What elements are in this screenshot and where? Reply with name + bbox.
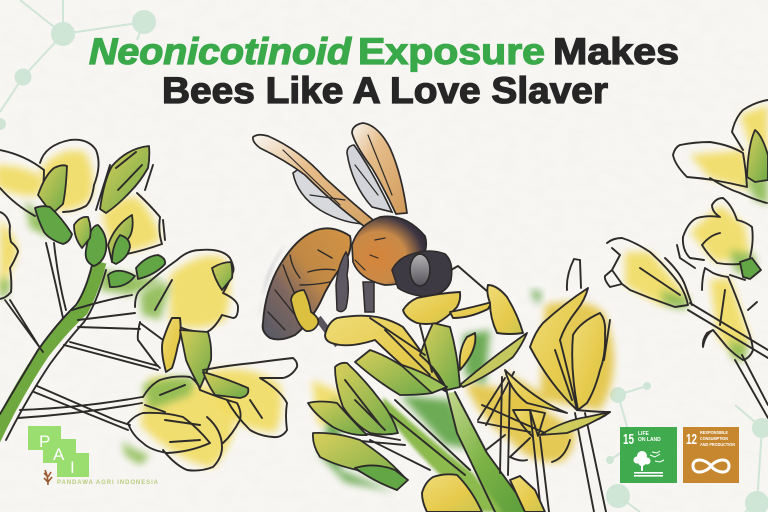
title: Exposure	[358, 31, 545, 72]
logo: Pandawa Agri Indonesia: I	[70, 458, 75, 477]
right top flower	[673, 100, 768, 203]
logo leaf icon	[44, 470, 52, 485]
right middle flower	[677, 198, 761, 280]
SDG 15 badge	[620, 427, 677, 483]
left middle flower and buds	[74, 193, 165, 287]
bee thorax	[352, 216, 426, 285]
left top bud	[96, 146, 153, 213]
SDG 12 badge: CONSUMPTION	[700, 436, 729, 441]
logo: Pandawa Agri Indonesia: A	[53, 445, 65, 464]
left edge flower	[0, 212, 18, 299]
molecule network: bottom right	[607, 383, 768, 512]
title: Neonicotinoid	[89, 31, 352, 72]
right stems	[688, 303, 768, 418]
SDG 15 badge: 15	[623, 431, 634, 448]
bee wings	[253, 123, 407, 238]
SDG 12 badge: AND PRODUCTION	[700, 442, 736, 447]
left lower flowers	[128, 358, 297, 471]
centre flower cluster	[308, 259, 614, 512]
SDG 12 badge	[683, 427, 739, 483]
right bud	[605, 238, 692, 307]
bee head	[392, 251, 488, 297]
SDG 12 badge: 12	[686, 431, 697, 448]
right washes	[625, 105, 768, 362]
title: Makes	[553, 31, 679, 72]
SDG 15 badge: LIFE	[638, 431, 649, 437]
logo: Pandawa Agri Indonesia: P	[39, 432, 50, 451]
bee legs	[291, 252, 374, 345]
left top flower	[0, 140, 99, 244]
left main stem	[0, 243, 158, 440]
title: Bees Like A Love Slaver	[162, 70, 608, 111]
left large flower	[135, 250, 238, 388]
right flower cluster	[605, 100, 768, 418]
logo: Pandawa Agri Indonesia: PANDAWA AGRI INDONESIA	[57, 480, 159, 486]
left flower cluster	[0, 140, 297, 471]
title	[89, 31, 679, 111]
SDG 15 badge: ON LAND	[638, 437, 661, 443]
icon: infinity loop	[693, 460, 729, 472]
SDG 12 badge: RESPONSIBLE	[700, 430, 728, 435]
centre left lower buds	[308, 363, 482, 512]
right lower flower	[702, 268, 757, 360]
bee abdomen	[263, 228, 351, 339]
centre right flower	[478, 259, 610, 512]
centre stems	[345, 372, 606, 512]
icon: tree and birds	[634, 451, 664, 477]
logo: Pandawa Agri Indonesia	[28, 426, 159, 486]
centre washes	[312, 290, 614, 492]
bee	[253, 123, 488, 345]
left washes	[0, 150, 282, 468]
bee soft shadow	[258, 245, 285, 320]
centre top petals	[325, 285, 527, 395]
molecule network: top left	[0, 0, 155, 129]
